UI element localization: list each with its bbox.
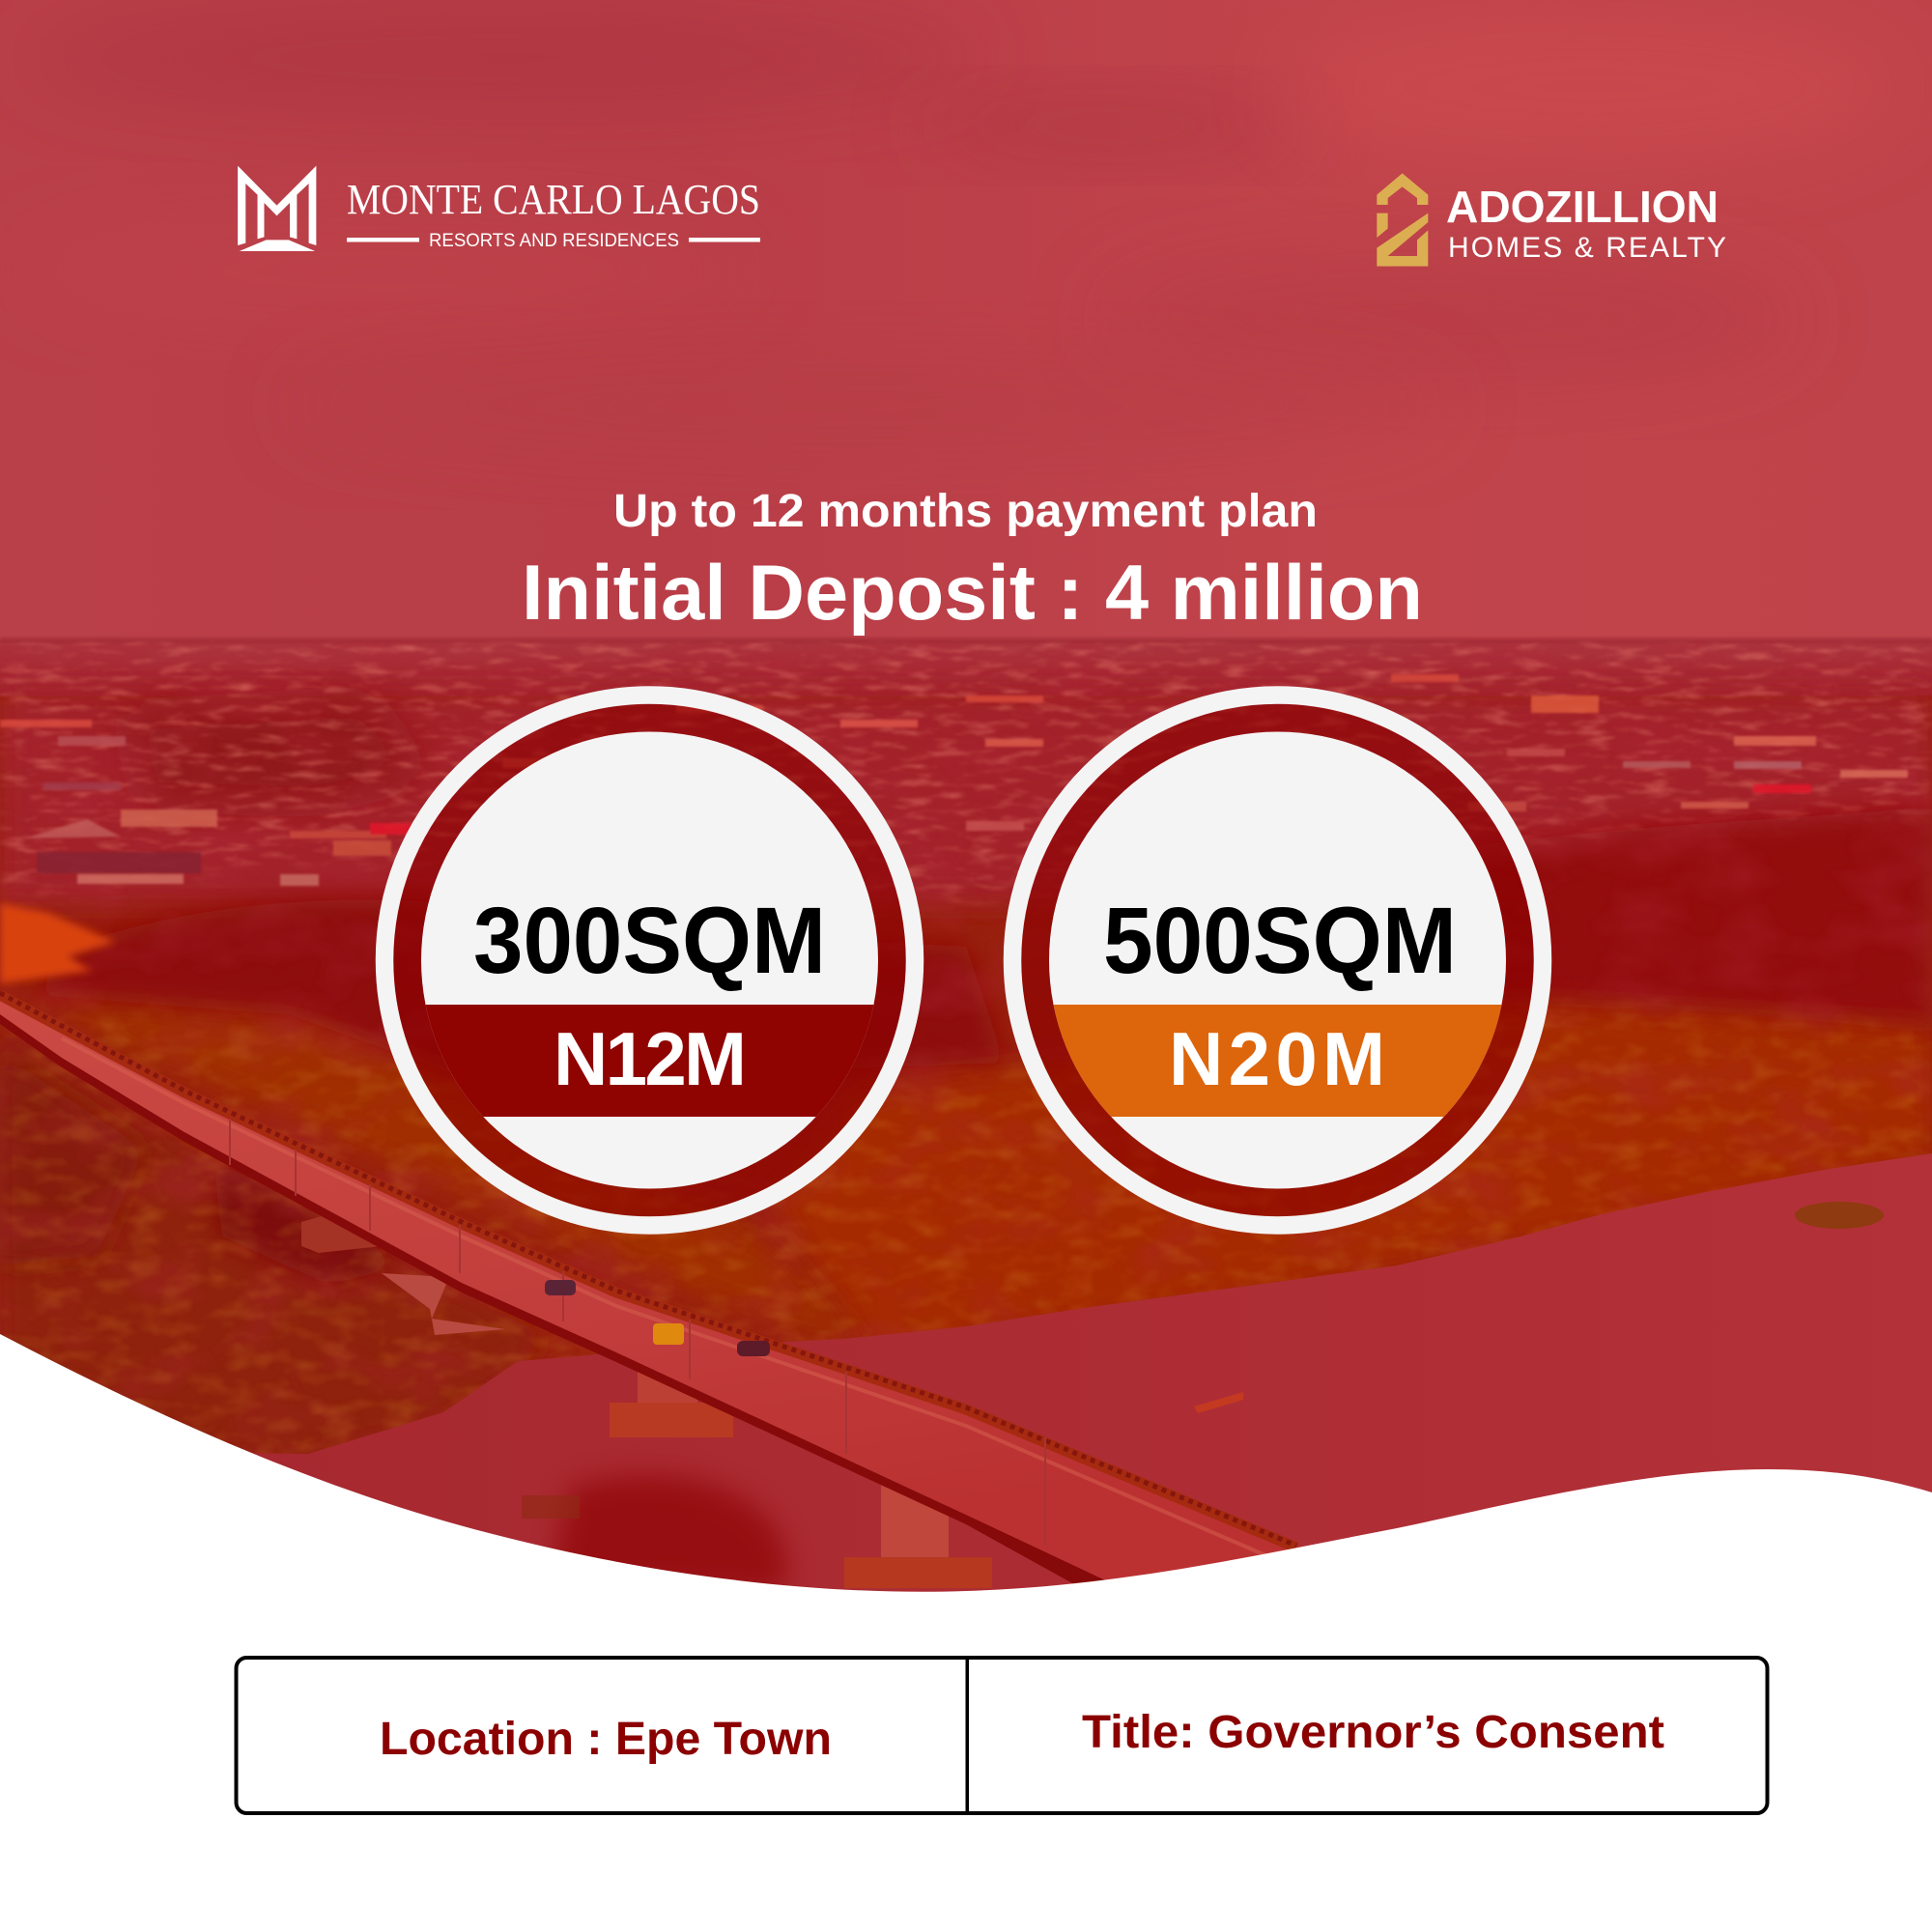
info table xyxy=(236,1658,1768,1813)
orange ground patch xyxy=(0,903,116,983)
icon: gold house xyxy=(1377,173,1428,267)
icon: M emblem xyxy=(238,166,316,251)
price band xyxy=(415,1005,884,1117)
background: land and vegetation xyxy=(0,638,1932,1507)
size label: 300SQM xyxy=(473,888,826,993)
dark tree belt right xyxy=(1484,800,1932,1021)
car: dark xyxy=(545,1280,576,1295)
logo tagline xyxy=(347,231,760,251)
bridge xyxy=(0,993,1296,1594)
logo wordmark: MONTE CARLO LAGOS xyxy=(347,176,760,223)
textures xyxy=(6,707,1930,1385)
location: Location : Epe Town xyxy=(380,1714,832,1765)
badge: 300SQM xyxy=(384,696,915,1225)
logo: Adozillion xyxy=(1377,173,1726,267)
heading: initial deposit: Initial Deposit : 4 million xyxy=(522,550,1423,637)
grass left above bridge xyxy=(75,1005,838,1335)
white wave xyxy=(0,1334,1932,1932)
dark town clumps xyxy=(124,701,425,802)
grass right xyxy=(773,1005,1932,1352)
size label: 500SQM xyxy=(1103,888,1457,993)
bridge piers xyxy=(301,1214,992,1588)
vegetation below bridge xyxy=(17,1146,514,1441)
title: Title: Governor’s Consent xyxy=(1082,1707,1664,1758)
background: far shore haze line xyxy=(0,638,1932,643)
logo tagline: RESORTS AND RESIDENCES xyxy=(429,231,679,251)
wordmark: ADOZILLION xyxy=(1446,182,1719,232)
heading: payment plan: Up to 12 months payment plan xyxy=(613,486,1318,537)
price band xyxy=(1043,1005,1512,1117)
sub wordmark: HOMES & REALTY xyxy=(1448,232,1726,264)
badge: 500SQM xyxy=(1012,696,1543,1225)
car: dark right xyxy=(737,1341,770,1356)
price label: N12M xyxy=(554,1016,747,1101)
background: water details xyxy=(522,1202,1884,1594)
dark tree belt left xyxy=(39,899,1005,1092)
price label: N20M xyxy=(1169,1016,1385,1101)
background: river xyxy=(0,1111,1932,1642)
logo: Monte Carlo Lagos xyxy=(238,166,760,251)
buildings xyxy=(0,674,1908,886)
car: yellow bus xyxy=(653,1323,684,1345)
background: sky xyxy=(0,0,1932,676)
